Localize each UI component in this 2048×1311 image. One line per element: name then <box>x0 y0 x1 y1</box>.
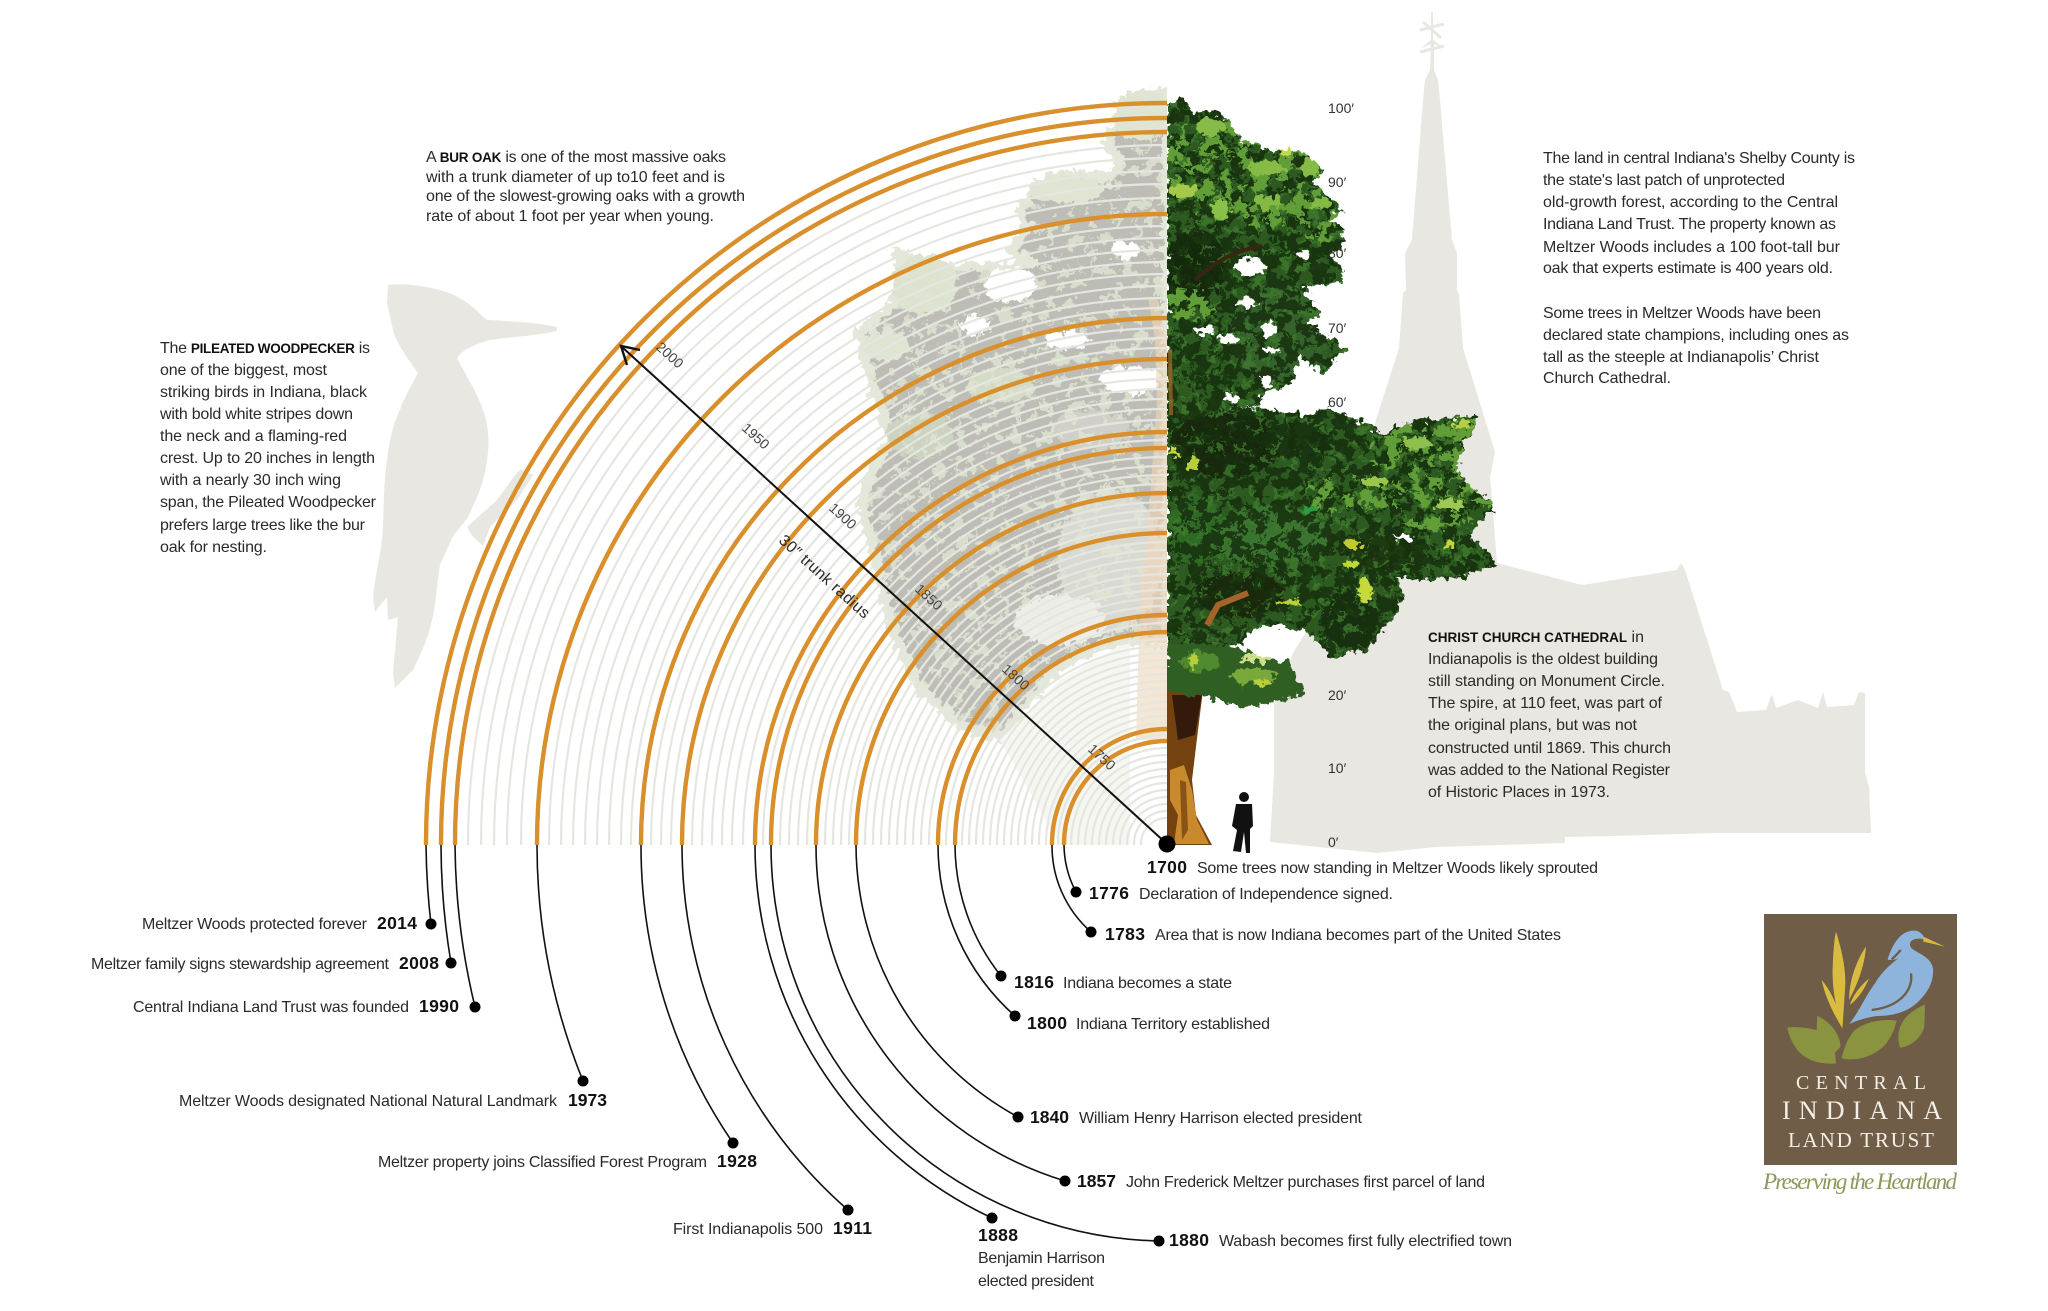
timeline labels: right side: 1857 <box>1077 1171 1116 1191</box>
timeline labels: left side: Meltzer property joins Classified Forest Program <box>378 1154 707 1171</box>
text: bur oak: A BUR OAK is one of the most massive oaks <box>426 149 726 166</box>
text: Shelby County land: Indiana Land Trust. The property known as <box>1543 216 1836 233</box>
timeline labels: left side: Meltzer Woods protected forever <box>142 916 368 933</box>
text: pileated woodpecker: with bold white stripes down <box>159 406 353 423</box>
text: Christ Church Cathedral: of Historic Places in 1973. <box>1428 784 1610 801</box>
logo: Central Indiana Land Trust: CENTRAL <box>1796 1072 1926 1094</box>
timeline labels: right side: Wabash becomes first fully electrified town <box>1219 1233 1512 1250</box>
ghost tree behind growth rings <box>840 80 1170 845</box>
timeline labels: left side: 2014 <box>377 913 417 933</box>
logo: Central Indiana Land Trust <box>1762 914 1958 1194</box>
timeline labels: left side: 1990 <box>419 996 459 1016</box>
height scale <box>1328 100 1354 850</box>
timeline labels: left side: Meltzer Woods designated National Natural Landmark <box>179 1093 558 1110</box>
silhouette: woodpecker <box>373 284 557 688</box>
decade labels along the radius: 1750 <box>1085 741 1119 774</box>
gaps between the leaves <box>1196 250 1413 541</box>
timeline labels: left side: 1911 <box>833 1218 872 1238</box>
text: Christ Church Cathedral: The spire, at 110 feet, was part of <box>1428 695 1663 712</box>
decade labels along the radius: 1950 <box>739 420 773 453</box>
timeline labels: right side <box>978 857 1598 1290</box>
growth rings: annual grey rings <box>468 145 1167 845</box>
text: Christ Church Cathedral: Indianapolis is the oldest building <box>1428 651 1658 668</box>
height scale: 0′ <box>1328 834 1339 850</box>
logo: Central Indiana Land Trust: LAND TRUST <box>1788 1128 1934 1152</box>
text: pileated woodpecker <box>159 340 377 556</box>
text: Shelby County land: Church Cathedral. <box>1543 370 1671 387</box>
person silhouette for scale <box>1232 792 1253 853</box>
timeline labels: right side: 1816 <box>1014 972 1054 992</box>
timeline labels: right side: elected president <box>978 1273 1095 1290</box>
timeline labels: right side: Area that is now Indiana becomes part of the United States <box>1155 927 1561 944</box>
tree trunk <box>1167 680 1212 845</box>
timeline labels: left side <box>91 913 872 1238</box>
arrow: 30 inch trunk radius <box>621 346 1167 844</box>
arrow label: 30″ trunk radius <box>775 532 873 622</box>
bottom branch foliage <box>1167 642 1307 707</box>
text: pileated woodpecker: span, the Pileated Woodpecker <box>160 494 377 511</box>
text: pileated woodpecker: oak for nesting. <box>160 539 267 556</box>
timeline labels: right side: Declaration of Independence signed. <box>1139 886 1393 903</box>
text: bur oak: one of the slowest-growing oaks with a growth <box>426 188 745 205</box>
text: Christ Church Cathedral: still standing on Monument Circle. <box>1428 673 1665 690</box>
text: pileated woodpecker: the neck and a flaming-red <box>160 428 347 445</box>
timeline labels: left side: Central Indiana Land Trust was founded <box>133 999 409 1016</box>
text: Christ Church Cathedral: the original plans, but was not <box>1428 717 1638 734</box>
timeline dots <box>426 836 1176 1246</box>
timeline labels: left side: First Indianapolis 500 <box>673 1221 823 1238</box>
decade labels along the radius: 2000 <box>653 339 687 372</box>
timeline labels: left side: Meltzer family signs stewardship agreement <box>91 956 390 973</box>
decade labels along the radius <box>653 339 1119 774</box>
text: Shelby County land: old-growth forest, according to the Central <box>1543 194 1838 211</box>
timeline labels: right side: Indiana becomes a state <box>1063 975 1232 992</box>
growth rings: orange event rings <box>426 103 1167 845</box>
text: bur oak <box>425 149 745 225</box>
timeline labels: right side: 1783 <box>1105 924 1145 944</box>
text: bur oak: rate of about 1 foot per year when young. <box>426 208 714 225</box>
height scale: 20′ <box>1328 687 1347 703</box>
text: pileated woodpecker: prefers large trees like the bur <box>160 517 366 534</box>
timeline labels: left side: 1928 <box>717 1151 757 1171</box>
text: pileated woodpecker: with a nearly 30 inch wing <box>159 472 341 489</box>
text: Shelby County land: oak that experts estimate is 400 years old. <box>1543 260 1833 277</box>
decade labels along the radius: 1800 <box>999 661 1033 694</box>
logo: Central Indiana Land Trust: INDIANA <box>1782 1096 1942 1125</box>
text: Christ Church Cathedral: was added to the National Register <box>1427 762 1671 779</box>
height scale: 90′ <box>1328 174 1347 190</box>
timeline connector arcs <box>426 845 1159 1241</box>
text: pileated woodpecker: crest. Up to 20 inches in length <box>160 450 375 467</box>
timeline labels: right side: Benjamin Harrison <box>978 1250 1105 1267</box>
silhouette: Christ Church Cathedral <box>1270 12 1871 853</box>
timeline labels: right side: Some trees now standing in Meltzer Woods likely sprouted <box>1197 860 1598 877</box>
timeline labels: right side: 1776 <box>1089 883 1129 903</box>
timeline labels: left side: 2008 <box>399 953 439 973</box>
timeline labels: right side: John Frederick Meltzer purchases first parcel of land <box>1126 1174 1485 1191</box>
timeline labels: left side: 1973 <box>568 1090 607 1110</box>
timeline labels: right side: 1840 <box>1030 1107 1069 1127</box>
timeline labels: right side: 1800 <box>1027 1013 1067 1033</box>
crown highlights <box>1167 118 1472 606</box>
height scale: 70′ <box>1328 320 1347 336</box>
text: Christ Church Cathedral: constructed until 1869. This church <box>1428 740 1671 757</box>
timeline labels: right side: 1700 <box>1147 857 1187 877</box>
timeline labels: right side: 1888 <box>978 1225 1018 1245</box>
decade labels along the radius: 1900 <box>826 500 860 533</box>
timeline labels: right side: Indiana Territory established <box>1076 1016 1270 1033</box>
text: Shelby County land: the state's last patch of unprotected <box>1543 172 1785 189</box>
text: Christ Church Cathedral: CHRIST CHURCH CATHEDRAL in <box>1428 629 1644 646</box>
text: Christ Church Cathedral <box>1427 629 1671 801</box>
text: pileated woodpecker: striking birds in Indiana, black <box>160 384 368 401</box>
logo emblem: heron, reeds and leaves <box>1787 931 1945 1064</box>
text: Shelby County land: Meltzer Woods includes a 100 foot-tall bur <box>1543 239 1841 256</box>
text: Shelby County land: Some trees in Meltzer Woods have been <box>1543 305 1821 322</box>
height scale: 60′ <box>1328 394 1347 410</box>
text: bur oak: with a trunk diameter of up to10 feet and is <box>425 169 725 186</box>
decade labels along the radius: 1850 <box>912 581 946 614</box>
tree foliage: oak crown in full colour <box>1167 96 1498 708</box>
timeline labels: right side: 1880 <box>1169 1230 1209 1250</box>
timeline labels: right side: William Henry Harrison elected president <box>1079 1110 1363 1127</box>
logo: Central Indiana Land Trust: Preserving the Heartland <box>1762 1169 1958 1194</box>
text: Shelby County land: tall as the steeple at Indianapolis’ Christ <box>1543 349 1820 366</box>
height scale: 100′ <box>1328 100 1354 116</box>
height scale: 80′ <box>1328 245 1347 261</box>
text: pileated woodpecker: The PILEATED WOODPECKER is <box>160 340 370 357</box>
height scale: 10′ <box>1328 760 1347 776</box>
text: Shelby County land: The land in central Indiana's Shelby County is <box>1543 150 1855 167</box>
branches <box>1170 246 1262 625</box>
text: Shelby County land: declared state champions, including ones as <box>1543 327 1849 344</box>
text: pileated woodpecker: one of the biggest, most <box>160 362 328 379</box>
text: Shelby County land <box>1543 150 1855 387</box>
